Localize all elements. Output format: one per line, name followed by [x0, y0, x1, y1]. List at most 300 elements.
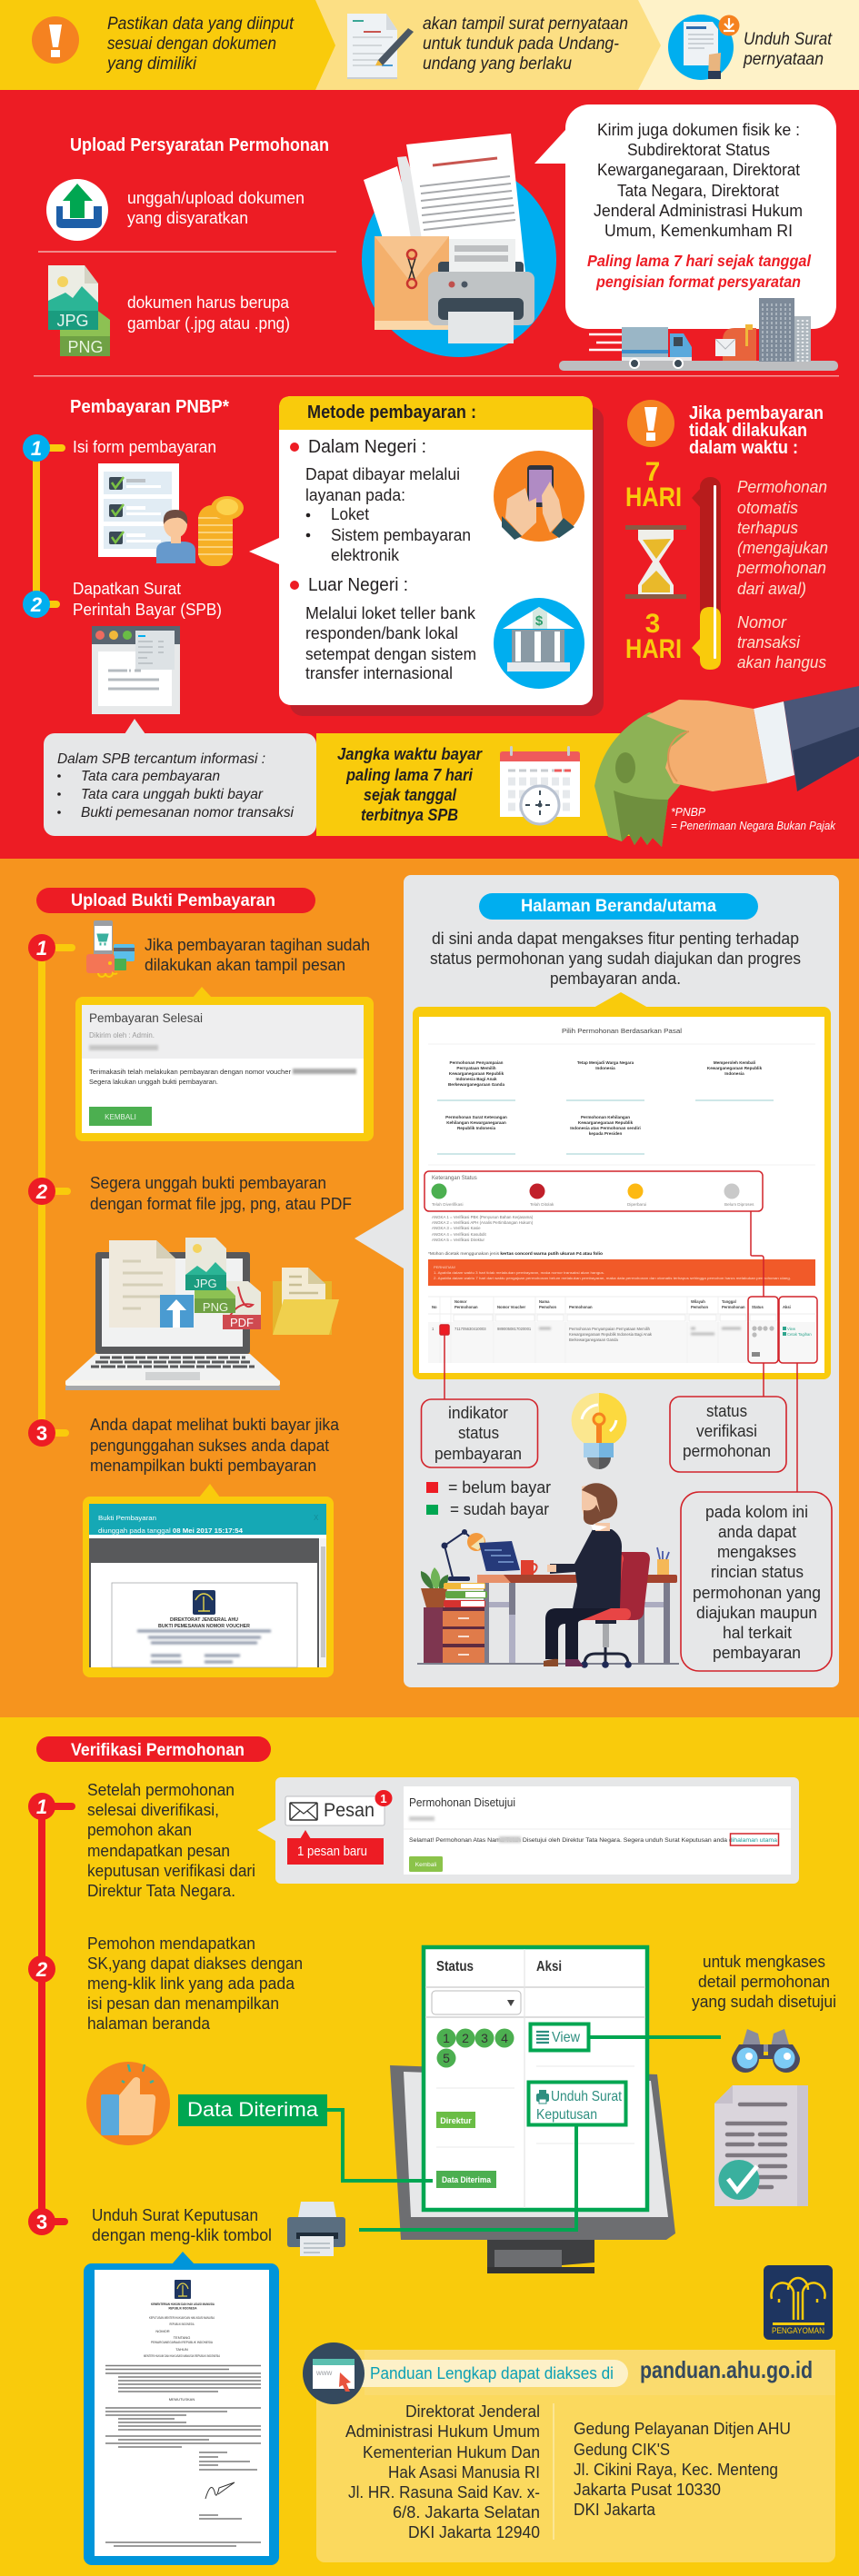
- text: verification step 2: isi pesan dan menampilkan: [87, 1994, 279, 2013]
- panel: home page: [355, 875, 839, 1687]
- text: domestic payment: elektronik: [331, 545, 400, 564]
- callout: action column: pada kolom ini: [705, 1502, 808, 1521]
- legend: status colours: [425, 1171, 763, 1211]
- text: payment deadline: Jangka waktu bayar: [337, 745, 483, 763]
- table: applications: Berkewarganegaraan Ganda: [569, 1338, 618, 1342]
- cards: application types: Tetap Menjadi Warga Negara: [577, 1060, 634, 1065]
- panel: SPB information: [44, 719, 634, 836]
- screenshot: application dashboard: Pilih Permohonan Berdasarkan Pasal: [562, 1027, 682, 1035]
- callout: new message: [287, 1830, 384, 1865]
- screenshot: application dashboard: *Mohon dicetak menggunakan jenis kertas concord warna putih ukuran F4 atau folio: [428, 1251, 603, 1257]
- document: decree letter: REPUBLIK INDONESIA: [169, 2322, 195, 2326]
- document: decree letter: MENTERI HUKUM DAN HAK ASASI MANUSIA REPUBLIK INDONESIA: [144, 2353, 220, 2358]
- table: applications: [428, 1297, 815, 1363]
- text: home page description: di sini anda dapat mengakses fitur penting terhadap: [432, 929, 799, 948]
- icon: browser: [303, 2342, 365, 2404]
- document: decree letter: TENTANG: [174, 2335, 190, 2340]
- text: verification steps: ANGKA 3 = Verifikasi Kasie: [432, 1226, 481, 1230]
- screenshot: payment complete: Pembayaran Selesai: [89, 1011, 203, 1025]
- screenshot: status and action table: [424, 1947, 647, 2210]
- text: overseas payment: Melalui loket teller bank: [305, 603, 476, 622]
- panel: top steps band: [0, 0, 833, 90]
- button: view: View: [552, 2030, 580, 2045]
- text: home page description: status permohonan yang sudah diajukan dan progres: [430, 949, 801, 968]
- legend: payment status: [426, 1477, 551, 1518]
- icon: phone wallet and cards: [86, 920, 135, 977]
- logo: Pengayoman: [764, 2265, 833, 2340]
- legend: status colours: Belum Diproses: [724, 1202, 754, 1207]
- text: image format: dokumen harus berupa: [127, 293, 290, 312]
- notice: attention bar: [428, 1259, 815, 1286]
- icon: upload: [46, 179, 108, 241]
- cards: application types: Permohonan Surat Keterangan: [445, 1115, 507, 1119]
- text: SPB contents: Dalam SPB tercantum informasi :: [57, 751, 265, 767]
- text: domestic payment: Loket: [331, 504, 369, 523]
- status: numbered circles: 5: [443, 2051, 450, 2065]
- screenshot: proof of payment: [83, 1484, 334, 1677]
- text: step 2: [90, 1173, 352, 1213]
- icon: hourglass: [625, 525, 686, 599]
- text: if payment not made: dalam waktu :: [689, 438, 798, 458]
- cards: application types: Permohonan Penyampaian: [450, 1060, 504, 1065]
- table: applications: Kewarganegaraan Republik Indonesia Bagi Anak: [569, 1332, 653, 1337]
- text: consequences: transaksi: [737, 633, 801, 651]
- timeline: verification steps: 1: [36, 1795, 47, 1818]
- screenshot: status and action table: Status: [436, 1959, 474, 1974]
- text: service building address: Jakarta Pusat 10330: [574, 2480, 721, 2499]
- notice: attention bar: PERHATIAN!: [434, 1265, 455, 1269]
- text: verification step 2: [87, 1934, 303, 2033]
- panel: PNBP payment steps: [23, 397, 634, 836]
- text: overseas payment: [290, 574, 476, 682]
- table: applications: Pemohon: [691, 1305, 709, 1309]
- text: office address: DKI Jakarta 12940: [408, 2522, 540, 2541]
- text: service building address: Jl. Cikini Raya, Kec. Menteng: [574, 2460, 778, 2479]
- legend: status colours: Telah Diverifikasi: [432, 1202, 463, 1207]
- screenshot: status and action table: Data Diterima: [442, 2175, 492, 2184]
- screenshot: payment complete: Terimakasih telah melakukan pembayaran dengan nomor voucher: [89, 1068, 291, 1076]
- illustration: laptop with uploaded files: [65, 1238, 339, 1390]
- icon: message button: 1: [380, 1792, 387, 1805]
- icon: message button: [285, 1790, 393, 1825]
- callout: verification status: status: [706, 1401, 747, 1420]
- text: consequences: Permohonan: [737, 478, 827, 496]
- text: SPB contents: [57, 751, 294, 821]
- icon: JPG and PNG files: PNG: [67, 338, 104, 356]
- text: download statement: pernyataan: [743, 50, 824, 69]
- cards: application types: Memperoleh Kembali: [714, 1060, 755, 1065]
- callout: guide link: [350, 2360, 628, 2387]
- text: SPB contents: Bukti pemesanan nomor transaksi: [81, 805, 294, 821]
- icon: download statement: [668, 15, 740, 80]
- text: destination address: Kewarganegaraan, Direktorat: [597, 160, 800, 179]
- panel: payment methods: [249, 396, 604, 716]
- label: data received: Data Diterima: [187, 2098, 319, 2121]
- text: step 2: dengan format file jpg, png, atau PDF: [90, 1194, 352, 1213]
- text: image format: [127, 293, 290, 333]
- timeline: upload steps: 3: [36, 1422, 47, 1445]
- text: agreement letter: akan tampil surat pernyataan: [423, 15, 628, 34]
- text: view details: detail permohonan: [698, 1972, 830, 1991]
- callout: payment status indicator: indikator: [448, 1403, 508, 1422]
- text: verification step 2: Pemohon mendapatkan: [87, 1934, 255, 1953]
- timeline: upload steps: 1: [36, 937, 47, 960]
- cards: application types: Kewarganegaraan Republik: [707, 1066, 763, 1070]
- notice: attention bar: 2. Apabila dalam waktu 7 hari dari waktu pengajuan permohonan belum melakukan pembayaran, maka data permohonan dan otomatis terhapus sehingga pemohon harus melakukan permohonan ulang.: [434, 1276, 791, 1280]
- text: step 3: Anda dapat melihat bukti bayar jika: [90, 1415, 340, 1434]
- text: overseas payment: transfer internasional: [305, 663, 453, 682]
- callout: action column: pembayaran: [713, 1643, 801, 1662]
- footnote: PNBP: = Penerimaan Negara Bukan Pajak: [671, 820, 836, 832]
- status: numbered circles: 3: [481, 2031, 488, 2045]
- icon: approved document: [714, 2085, 808, 2206]
- panel: approved message: [257, 1777, 799, 1884]
- icon: printer: [287, 2202, 345, 2256]
- text: service building address: Gedung CIK'S: [574, 2440, 670, 2459]
- text: destination address: Kirim juga dokumen fisik ke :: [597, 120, 800, 139]
- icon: calendar and clock: [500, 746, 580, 824]
- text: consequences: Nomor: [737, 613, 787, 632]
- text: verification steps: ANGKA 5 = Verifikasi Direktur: [432, 1238, 484, 1242]
- icon: browser: www: [315, 2369, 333, 2377]
- screenshot: proof of payment: BUKTI PEMESANAN NOMOR VOUCHER: [158, 1624, 250, 1629]
- screenshot: payment complete: [75, 987, 374, 1141]
- callout: new message: 1 pesan baru: [297, 1844, 367, 1859]
- callout: guide link: Panduan Lengkap dapat diakses di: [370, 2363, 614, 2382]
- callout: verification status: verifikasi: [696, 1421, 757, 1440]
- text: office address: Administrasi Hukum Umum: [345, 2422, 540, 2441]
- text: verification step 2: SK,yang dapat diakses dengan: [87, 1954, 303, 1973]
- button: download decree: [529, 2083, 625, 2124]
- callout: action column: rincian status: [711, 1562, 804, 1581]
- text: SPB contents: Tata cara pembayaran: [81, 769, 220, 784]
- table: applications: 1: [432, 1327, 434, 1331]
- text: if payment not made: tidak dilakukan: [689, 421, 807, 441]
- screenshot: proof of payment: X: [314, 1514, 319, 1522]
- footnote: PNBP: *PNBP: [671, 806, 706, 819]
- text: step 1: [145, 935, 370, 974]
- text: verification steps: ANGKA 2 = Verifikasi APH (Analis Pertimbangan Hukum): [432, 1220, 534, 1225]
- label: 7 days: HARI: [625, 482, 682, 512]
- cards: application types: Kehilangan Kewarganegaraan: [446, 1120, 506, 1125]
- illustration: laptop with uploaded files: PDF: [230, 1316, 254, 1329]
- document: decree letter: PEWARGANEGARAAN REPUBLIK INDONESIA: [151, 2340, 213, 2344]
- table: applications: Permohonan: [569, 1305, 593, 1309]
- text: office address: Hak Asasi Manusia RI: [388, 2462, 540, 2482]
- text: consequences: permohonan: [736, 559, 826, 577]
- table: applications: Nama: [539, 1299, 550, 1304]
- callout: action column: hal terkait: [723, 1623, 792, 1642]
- heading: upload proof of payment: Upload Bukti Pembayaran: [71, 891, 275, 910]
- text: service building address: Gedung Pelayanan Ditjen AHU: [574, 2419, 791, 2438]
- timeline: upload steps: 2: [35, 1180, 48, 1203]
- icon: thumbs up: [86, 2062, 170, 2145]
- text: verification step 1: Setelah permohonan: [87, 1780, 235, 1799]
- document: decree letter: KEMENTERIAN HUKUM DAN HAK ASASI MANUSIA: [151, 2302, 215, 2306]
- document: decree letter: NOMOR: [155, 2329, 170, 2333]
- text: domestic payment: layanan pada:: [305, 485, 405, 504]
- button: download decree: Keputusan: [536, 2107, 597, 2123]
- label: 3 days: 3: [645, 609, 660, 639]
- icon: JPG and PNG files: JPG: [56, 312, 89, 330]
- text: upload documents: unggah/upload dokumen: [127, 188, 305, 207]
- text: verification step 2: meng-klik link yang ada pada: [87, 1974, 295, 1993]
- icon: bank: [494, 598, 584, 689]
- text: verification step 1: selesai diverifikasi,: [87, 1800, 219, 1819]
- text: verification step 1: mendapatkan pesan: [87, 1841, 230, 1860]
- text: check data: Pastikan data yang diinput: [107, 15, 295, 34]
- screenshot: approval notice: Kembali: [415, 1862, 436, 1868]
- callout: payment status indicator: [422, 1399, 538, 1467]
- text: step 1: Jika pembayaran tagihan sudah: [145, 935, 370, 954]
- text: consequences: otomatis: [737, 499, 798, 517]
- text: obtain SPB: [73, 579, 222, 619]
- text: view details: yang sudah disetujui: [692, 1992, 836, 2011]
- screenshot: payment complete: KEMBALI: [105, 1113, 136, 1121]
- text: consequences: akan hangus: [737, 653, 826, 671]
- text: check data: yang dimiliki: [105, 55, 197, 74]
- text: agreement letter: undang yang berlaku: [423, 55, 572, 74]
- text: home page description: pembayaran anda.: [550, 969, 681, 988]
- text: view details: [692, 1952, 836, 2011]
- cards: application types: Pernyataan Memilih: [456, 1066, 496, 1070]
- cards: application types: Indonesia: [595, 1066, 615, 1070]
- text: verification step 3: [92, 2205, 272, 2244]
- text: office address: Direktorat Jenderal: [405, 2402, 540, 2421]
- footnote: PNBP: [671, 806, 836, 832]
- text: if payment not made: [689, 403, 824, 458]
- timeline: upload steps: [28, 934, 75, 1447]
- screenshot: payment complete: Dikirim oleh : Admin.: [89, 1031, 155, 1039]
- screenshot: approval notice: [404, 1786, 791, 1875]
- logo: Pengayoman: PENGAYOMAN: [772, 2326, 824, 2336]
- icon: mobile payment: [494, 451, 584, 542]
- legend: status colours: Diperbarui: [627, 1202, 646, 1207]
- text: destination address: Tata Negara, Direktorat: [617, 181, 779, 200]
- text: domestic payment: Sistem pembayaran: [331, 525, 471, 544]
- text: check data: [105, 15, 295, 74]
- status: numbered circles: [436, 2028, 514, 2068]
- legend: payment status: = sudah bayar: [450, 1499, 549, 1518]
- text: verification step 2: halaman beranda: [87, 2014, 211, 2033]
- text: destination address: Subdirektorat Status: [627, 140, 770, 159]
- text: obtain SPB: Dapatkan Surat: [73, 579, 181, 598]
- heading: home page: Halaman Beranda/utama: [521, 897, 716, 916]
- timeline: payment steps: [23, 434, 65, 618]
- text: service building address: DKI Jakarta: [574, 2500, 656, 2519]
- text: agreement letter: [423, 15, 628, 74]
- timeline: verification steps: 3: [36, 2211, 47, 2233]
- table: applications: Aksi: [783, 1305, 791, 1309]
- text: download statement: [743, 30, 833, 69]
- illustration: documents, envelope and printer: [362, 134, 556, 357]
- label: 3 days: HARI: [625, 634, 682, 664]
- legend: status colours: Telah Ditolak: [530, 1202, 554, 1207]
- panel: guide and addresses: [303, 2342, 835, 2562]
- panel: late payment warning: [625, 400, 828, 671]
- table: applications: 9890050817020001: [497, 1327, 532, 1331]
- document: decree letter: TAHUN: [175, 2347, 188, 2352]
- legend: status colours: Keterangan Status: [432, 1176, 477, 1181]
- text: payment deadline: sejak tanggal: [364, 786, 457, 804]
- heading: PNBP payment: Pembayaran PNBP*: [70, 397, 229, 417]
- text: domestic payment: Dapat dibayar melalui: [305, 464, 460, 483]
- text: upload documents: yang disyaratkan: [127, 208, 248, 227]
- cards: application types: [445, 1060, 763, 1136]
- legend: payment status: = belum bayar: [448, 1477, 551, 1497]
- icon: warning: [627, 400, 674, 447]
- text: consequences: [736, 478, 828, 671]
- chart: deadline thermometer: [692, 477, 721, 670]
- panel: upload requirements: [34, 104, 839, 376]
- text: payment deadline: [337, 745, 483, 824]
- timeline: verification steps: [28, 1793, 75, 2235]
- status: numbered circles: 4: [501, 2031, 508, 2045]
- icon: JPG and PNG files: [48, 265, 110, 356]
- text: office address: Jl. HR. Rasuna Said Kav. x-: [348, 2482, 540, 2501]
- illustration: laptop with uploaded files: JPG: [194, 1277, 217, 1290]
- table: applications: View: [787, 1327, 796, 1331]
- table: applications: Wilayah: [691, 1299, 705, 1304]
- cards: application types: Kewarganegaraan Republik: [578, 1120, 634, 1125]
- cards: application types: Republik Indonesia: [457, 1126, 495, 1130]
- illustration: hand paying money: [594, 686, 859, 847]
- text: upload documents: [127, 188, 305, 227]
- text: verification steps: ANGKA 1 = Verifikasi PBK (Penyusun Bahan Kerjasama): [432, 1215, 534, 1219]
- document: decree letter: KEPUTUSAN MENTERI HUKUM DAN HAK ASASI MANUSIA: [149, 2315, 215, 2320]
- document: decree letter: MEMUTUSKAN: [169, 2397, 195, 2402]
- text: domestic payment: [290, 436, 471, 564]
- text: verification step 1: Direktur Tata Negara.: [87, 1881, 235, 1900]
- table: applications: Permohonan: [454, 1305, 478, 1309]
- text: view details: untuk mengkases: [703, 1952, 825, 1971]
- label: 3 days: [625, 609, 682, 664]
- text: step 3: [90, 1415, 340, 1475]
- screenshot: status and action table: Direktur: [440, 2116, 472, 2125]
- screenshot: application dashboard: [413, 992, 831, 1379]
- text: overseas payment: setempat dengan sistem: [305, 644, 476, 663]
- document: decree letter: REPUBLIK INDONESIA: [169, 2306, 197, 2310]
- text: destination address: Umum, Kemenkumham RI: [604, 221, 793, 240]
- table: applications: Tanggal: [722, 1299, 736, 1304]
- screenshot: proof of payment: Bukti Pembayaran: [98, 1514, 156, 1522]
- timeline: verification steps: 2: [35, 1958, 48, 1981]
- text: check data: sesuai dengan dokumen: [107, 35, 276, 54]
- screenshot: payment complete: Segera lakukan unggah bukti pembayaran.: [89, 1078, 218, 1086]
- screenshot: approval notice: Permohonan Disetujui: [409, 1795, 515, 1809]
- cards: application types: Indonesia: [724, 1071, 744, 1076]
- text: home page description: [430, 929, 801, 988]
- cards: application types: Indonesia atas Permohonan sendiri: [570, 1126, 641, 1130]
- text: verification step 3: dengan meng-klik tombol: [92, 2225, 272, 2244]
- callout: action column: permohonan yang: [693, 1583, 821, 1602]
- text: step 2: Segera unggah bukti pembayaran: [90, 1173, 326, 1192]
- icon: light bulb: [572, 1393, 626, 1469]
- notice: attention bar: 1. Apabila dalam waktu 3 hari tidak melakukan pembayaran, maka nomor transaksi akan hangus.: [434, 1270, 604, 1275]
- callout: verification status: [670, 1397, 786, 1472]
- text: verification step 3: Unduh Surat Keputusan: [92, 2205, 258, 2224]
- illustration: laptop with uploaded files: PNG: [203, 1300, 228, 1314]
- cards: application types: kepada Presiden: [589, 1131, 622, 1136]
- text: consequences: terhapus: [737, 519, 798, 537]
- timeline: payment steps: 1: [31, 437, 42, 460]
- screenshot: proof of payment: DIREKTORAT JENDERAL AHU: [170, 1617, 238, 1623]
- callout: physical documents: [534, 104, 836, 329]
- heading: application verification: [36, 1736, 271, 1762]
- text: office address: 6/8. Jakarta Selatan: [393, 2502, 540, 2521]
- screenshot: proof of payment: diunggah pada tanggal 08 Mei 2017 15:17:54: [98, 1527, 244, 1535]
- text: guide URL: panduan.ahu.go.id: [640, 2356, 813, 2383]
- screenshot: status and action table: Aksi: [536, 1959, 562, 1974]
- table: applications: Pemohon: [539, 1305, 557, 1309]
- text: verification step 1: [87, 1780, 255, 1900]
- text: payment deadline: terbitnya SPB: [361, 806, 458, 824]
- cards: application types: Berkewarganegaraan Ganda: [448, 1082, 504, 1087]
- callout: payment status indicator: pembayaran: [434, 1444, 522, 1463]
- text: step 3: menampilkan bukti pembayaran: [90, 1456, 316, 1475]
- illustration: man working at desk: [417, 1483, 679, 1668]
- text: step 1: dilakukan akan tampil pesan: [145, 955, 345, 974]
- callout: action column: anda dapat: [718, 1522, 796, 1541]
- status: numbered circles: 1: [443, 2031, 450, 2045]
- button: view: [531, 2024, 589, 2050]
- button: download decree: Unduh Surat: [551, 2089, 622, 2104]
- text: office address: Kementerian Hukum Dan: [363, 2442, 540, 2462]
- callout: payment status indicator: status: [458, 1423, 499, 1442]
- text: consequences: (mengajukan: [737, 539, 828, 557]
- icon: bank: $: [535, 613, 544, 629]
- text: fill form: Isi form pembayaran: [73, 437, 216, 456]
- text: download statement: Unduh Surat: [744, 30, 833, 49]
- label: data received: [178, 2094, 327, 2126]
- text: SPB contents: Tata cara unggah bukti bayar: [81, 787, 264, 802]
- illustration: SPB browser window: [92, 626, 180, 714]
- illustration: form with person and coins: [98, 463, 244, 566]
- heading: upload proof of payment: [36, 888, 315, 913]
- label: 7 days: 7: [645, 457, 660, 487]
- table: applications: Permohonan: [722, 1305, 745, 1309]
- illustration: monitor: [390, 2065, 675, 2273]
- heading: upload requirements: Upload Persyaratan Permohonan: [70, 135, 329, 155]
- text: verification step 1: keputusan verifikasi dari: [87, 1861, 255, 1880]
- text: deadline: pengisian format persyaratan: [595, 273, 801, 291]
- heading: payment methods: Metode pembayaran :: [307, 403, 476, 423]
- text: agreement letter: untuk tunduk pada Undang-: [423, 35, 619, 54]
- heading: home page: [479, 893, 758, 920]
- callout: action column: [681, 1492, 832, 1671]
- text: consequences: dari awal): [737, 580, 806, 598]
- label: 7 days: [625, 457, 682, 512]
- table: applications: Nomor Voucher: [497, 1305, 525, 1309]
- table: applications: Nomor: [454, 1299, 467, 1304]
- text: deadline: [587, 252, 812, 291]
- text: deadline: Paling lama 7 hari sejak tanggal: [587, 252, 812, 270]
- heading: application verification: Verifikasi Permohonan: [71, 1741, 245, 1760]
- text: office address: [345, 2402, 540, 2541]
- text: payment deadline: paling lama 7 hari: [345, 766, 474, 784]
- status: numbered circles: 2: [462, 2031, 469, 2045]
- text: overseas payment: responden/bank lokal: [305, 623, 458, 642]
- document: decree letter: [84, 2252, 279, 2565]
- icon: warning: [32, 16, 79, 64]
- icon: document and pen: [347, 14, 414, 79]
- text: if payment not made: Jika pembayaran: [689, 403, 824, 423]
- callout: action column: mengakses: [717, 1542, 796, 1561]
- text: destination address: Jenderal Administrasi Hukum: [594, 201, 803, 220]
- text: step 3: pengunggahan sukses anda dapat: [90, 1436, 329, 1455]
- text: verification step 1: pemohon akan: [87, 1820, 192, 1839]
- text: image format: gambar (.jpg atau .png): [127, 313, 290, 333]
